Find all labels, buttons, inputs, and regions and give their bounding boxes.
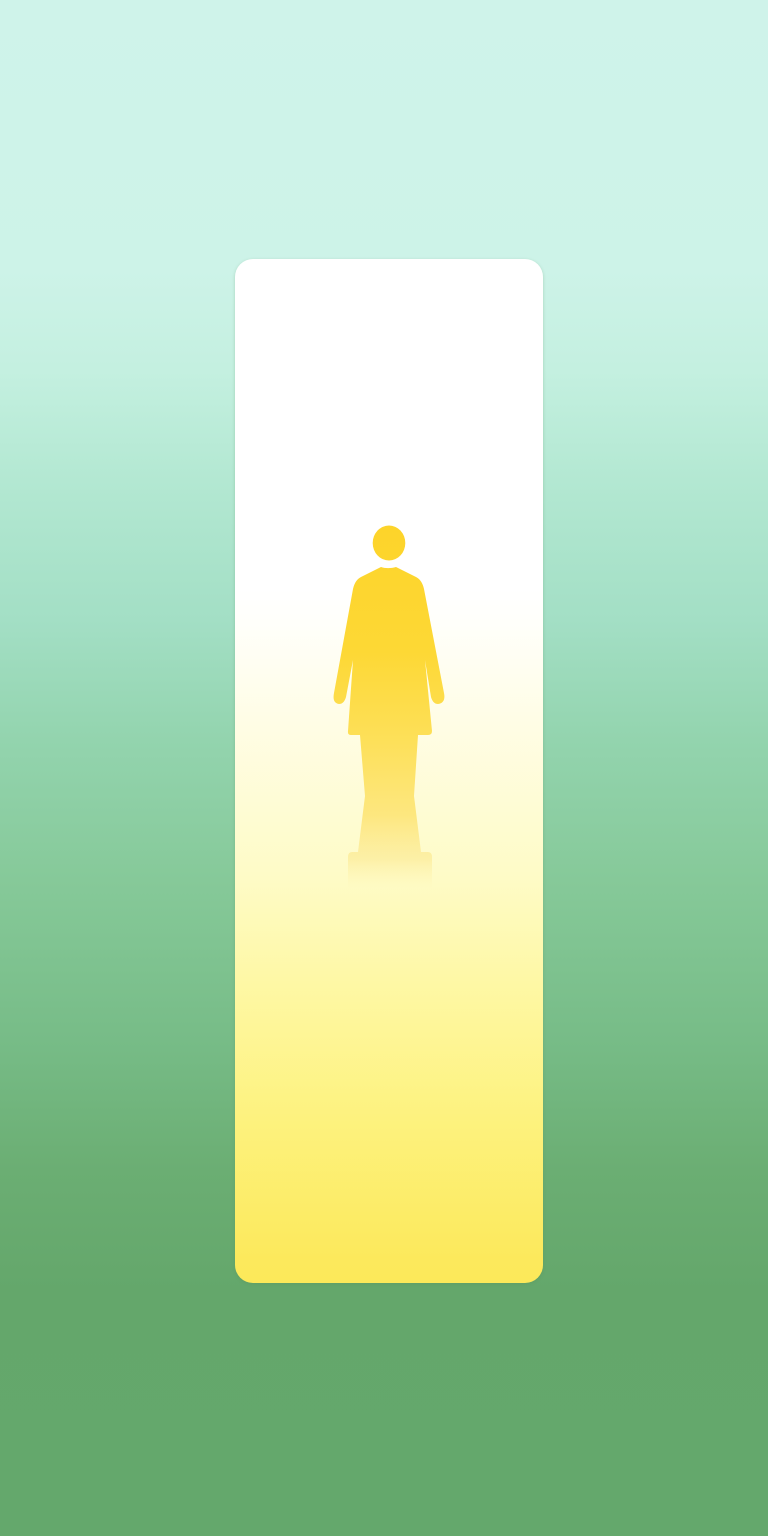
body — [334, 567, 444, 888]
head — [373, 526, 405, 560]
panel: white to yellow card — [235, 259, 542, 1283]
